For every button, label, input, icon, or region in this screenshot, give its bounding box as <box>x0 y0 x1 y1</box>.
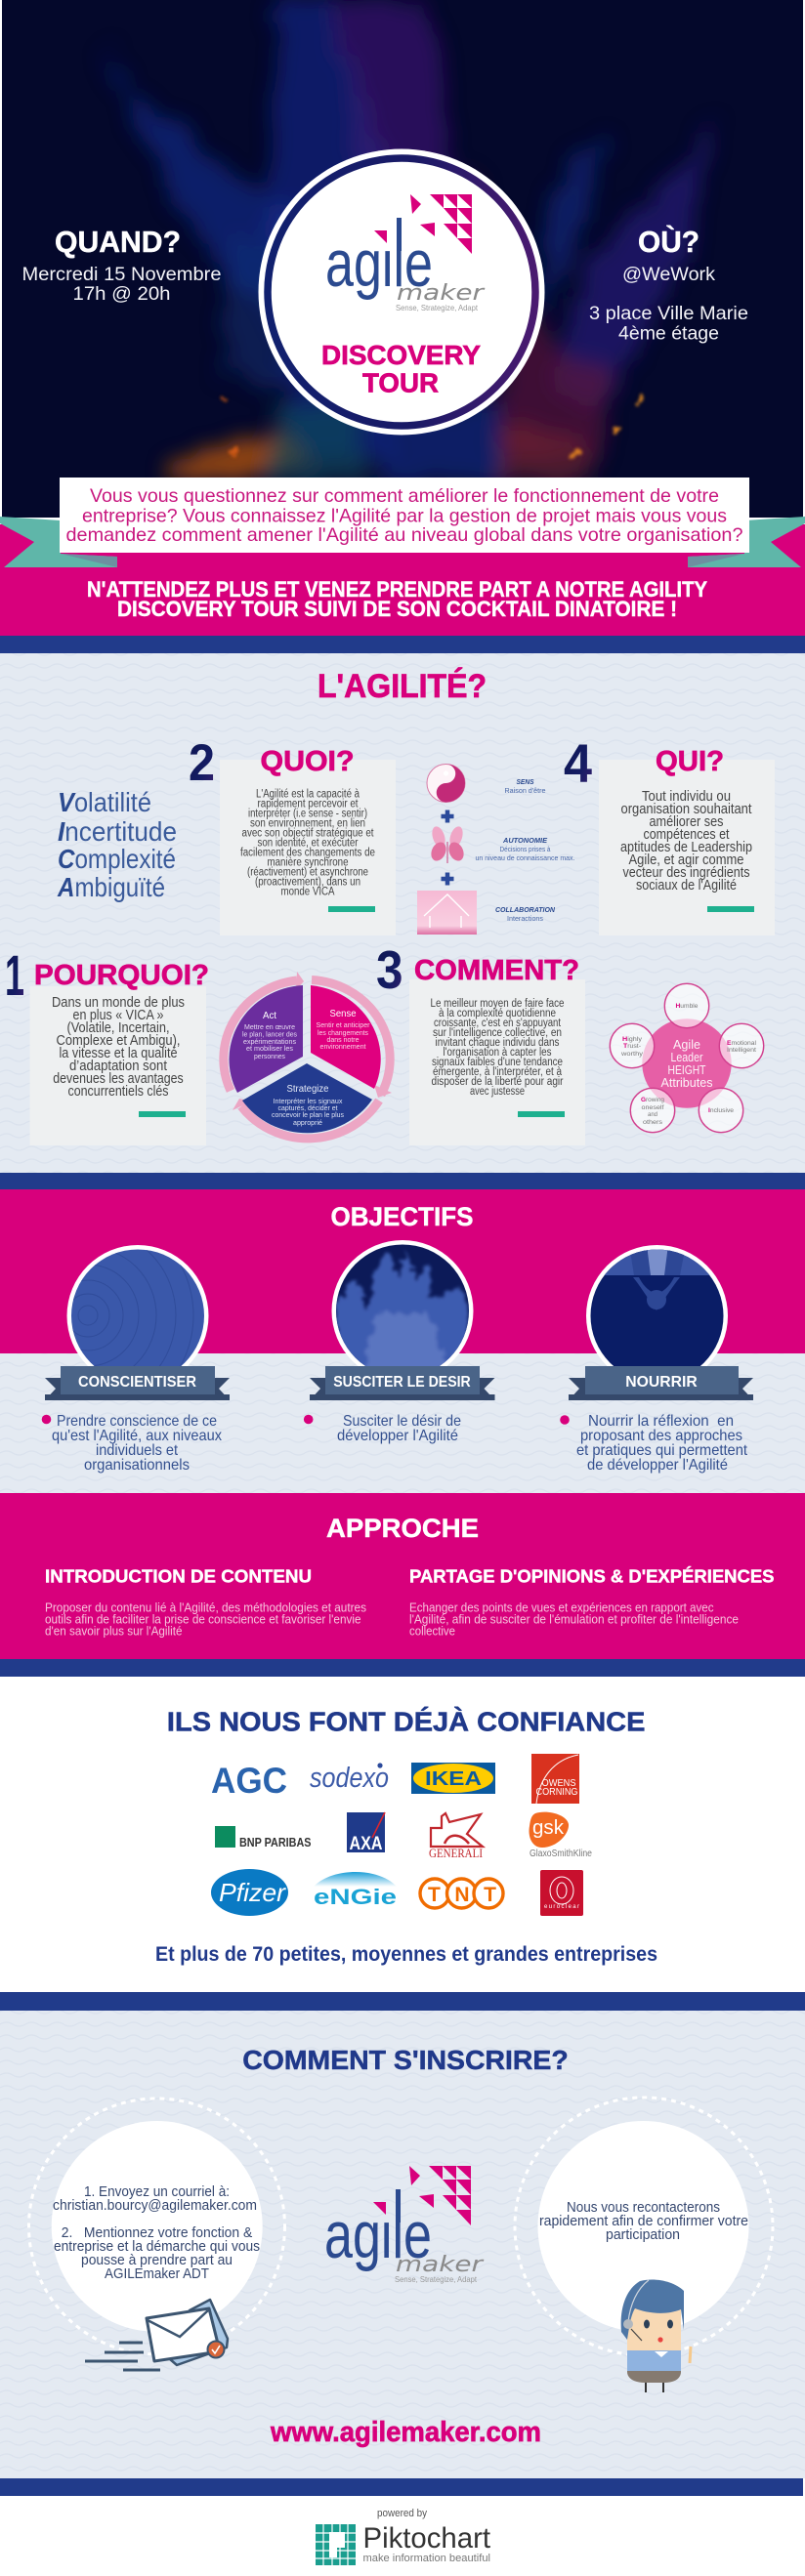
logo: Generali <box>429 1813 483 1860</box>
logo: TNT: TNT <box>428 1884 496 1906</box>
where block: @WeWork <box>622 265 716 285</box>
segment: strategize: approprié <box>293 1120 322 1127</box>
diagram: agile leader height attributes: Humble <box>676 1003 699 1010</box>
section: objectifs pink background <box>0 1189 805 1353</box>
text: objectif 1: organisationnels <box>84 1457 190 1474</box>
footer: piktochart brand: make information beautiful <box>363 2553 490 2564</box>
icon: envelope <box>85 2300 228 2370</box>
step 1 circle: pousse à prendre part au <box>81 2252 233 2268</box>
step 1 circle: AGILEmaker ADT <box>105 2265 209 2282</box>
panel: pourquoi: Dans un monde de plus <box>52 995 185 1011</box>
intro text box <box>60 478 749 553</box>
text: objectif 3 <box>560 1413 748 1474</box>
panel: pourquoi: POURQUOI? <box>34 960 209 991</box>
panel: qui: QUI? <box>656 746 724 777</box>
logo: Owens Corning <box>531 1754 579 1804</box>
section: objectifs light background <box>0 1353 805 1493</box>
VICA list <box>57 787 177 902</box>
panel: qui: sociaux de l'Agilité <box>636 878 737 893</box>
panel: quoi: son identité, et exécuter <box>258 838 359 850</box>
blue divider <box>0 1173 805 1189</box>
panel: comment: Le meilleur moyen de faire face <box>430 998 565 1010</box>
panel: quoi: monde VICA <box>281 887 335 898</box>
column: introduction de contenu <box>45 1566 366 1639</box>
label: collaboration: Interactions <box>507 914 543 923</box>
diagram: agile leader height attributes: Intelligent <box>727 1047 756 1054</box>
cycle arrows <box>224 980 390 1139</box>
subtitle: plus de 70 entreprises: Et plus de 70 petites, moyennes et grandes entreprises <box>155 1943 657 1966</box>
panel: comment: 3 <box>376 939 402 1000</box>
central badge with logo <box>258 148 545 436</box>
panel: pourquoi: en plus « VICA » <box>72 1008 164 1023</box>
logo: agile maker <box>325 194 486 312</box>
diagram: agile leader height attributes: Agile <box>673 1037 700 1052</box>
logo: euroclear: euroclear <box>544 1904 579 1910</box>
diagram: agile leader height attributes: Highly <box>622 1036 643 1043</box>
VICA list: Ambiguïté <box>57 872 165 902</box>
text: objectif 2: Susciter le désir de <box>343 1413 461 1430</box>
panel: pourquoi: (Volatile, Incertain, <box>66 1020 170 1036</box>
logo: Generali: GENERALI <box>429 1847 483 1860</box>
logo: GSK <box>530 1812 592 1859</box>
segment: act: et mobiliser les <box>246 1046 294 1053</box>
segment: sense: les changements <box>318 1030 368 1037</box>
label: sens: SENS <box>516 779 534 786</box>
step 1 circle: entreprise et la démarche qui vous <box>54 2238 260 2255</box>
segment: strategize: Interpréter les signaux <box>274 1099 343 1105</box>
segment: act: personnes <box>254 1054 285 1060</box>
ribbon: susciter le desir: SUSCITER LE DESIR <box>333 1374 471 1391</box>
ribbon: nourrir <box>569 1366 753 1400</box>
panel: pourquoi: Complexe et Ambigu), <box>57 1033 180 1049</box>
diagram: agile leader height attributes: HEIGHT <box>668 1062 706 1077</box>
panel: qui <box>564 732 775 935</box>
icon: piktochart grid <box>316 2524 356 2565</box>
segment: strategize: Strategize <box>287 1084 329 1095</box>
where block: OÙ? <box>638 224 699 259</box>
segment: act: Act <box>263 1011 276 1021</box>
intro text box: entreprise? Vous connaissez l'Agilité par la gestion de projet mais vous vous <box>82 506 727 527</box>
section background: agilité <box>0 653 805 1173</box>
panel: pourquoi <box>5 944 209 1145</box>
logo: sodexo: sodexo <box>310 1763 389 1794</box>
text: objectif 3: proposant des approches <box>580 1428 742 1444</box>
panel: comment: émergente, à l'interpréter, et à <box>433 1066 563 1078</box>
segment: strategize: capturés, décider et <box>277 1105 338 1112</box>
panel: comment: croissante, c'est en s'appuyant <box>434 1018 562 1029</box>
diagram: agile leader height attributes: Trust- <box>623 1043 641 1050</box>
panel: quoi: (réactivement) et asynchrone <box>247 867 368 879</box>
image circle: powder <box>332 1240 473 1366</box>
diagram: agile leader height attributes: Leader <box>670 1050 703 1064</box>
column: introduction de contenu: INTRODUCTION DE CONTENU <box>45 1566 312 1586</box>
text: objectif 3: Nourrir la réflexion en <box>588 1413 734 1430</box>
panel: quoi: manière synchrone <box>268 857 348 869</box>
panel: qui: organisation souhaitant <box>621 802 752 817</box>
ribbon: nourrir: NOURRIR <box>625 1374 698 1391</box>
panel: comment: invitant chaque individu dans <box>436 1037 560 1049</box>
icon: butterfly <box>428 825 467 863</box>
cycle diagram: sense strategize act <box>224 972 392 1139</box>
label: autonomie: AUTONOMIE <box>502 838 547 845</box>
panel: qui: Agile, et agir comme <box>629 852 744 868</box>
segment: strategize: concevoir le plan le plus <box>272 1112 344 1119</box>
heading: comment s'inscrire: COMMENT S'INSCRIRE? <box>242 2045 569 2075</box>
image: collaboration house <box>417 891 477 935</box>
blue divider <box>0 1992 805 2011</box>
central badge with logo: DISCOVERY <box>321 340 481 370</box>
logo: AXA <box>347 1812 385 1854</box>
blue divider <box>0 636 805 653</box>
ribbon: susciter le desir <box>310 1366 494 1400</box>
segment: sense: Sense <box>330 1009 357 1019</box>
logo: IKEA: IKEA <box>425 1768 482 1790</box>
panel: comment: l'organisation à capter les <box>444 1047 552 1059</box>
logo: Owens Corning: CORNING <box>535 1786 578 1798</box>
section: inscription background <box>0 2011 805 2478</box>
call to action text: DISCOVERY TOUR SUIVI DE SON COCKTAIL DINATOIRE ! <box>117 597 677 621</box>
heading: objectifs: OBJECTIFS <box>330 1202 473 1231</box>
footer: piktochart brand: powered by <box>377 2508 427 2519</box>
diagram: agile leader height attributes: oneself <box>641 1104 664 1111</box>
logo: agile maker: agile <box>325 227 433 301</box>
plus sign <box>442 873 453 885</box>
where block: 4ème étage <box>618 324 719 344</box>
logo: agile maker (footer block): maker <box>396 2253 485 2277</box>
step 2 circle: rapidement afin de confirmer votre <box>539 2213 748 2229</box>
where block: 3 place Ville Marie <box>589 304 748 324</box>
panel: quoi: rapidement percevoir et <box>258 799 359 810</box>
step 2 circle <box>515 2098 773 2355</box>
column: introduction de contenu: outils afin de faciliter la prise de conscience et favoriser l'envie <box>45 1613 361 1627</box>
panel: pourquoi: devenues les avantages <box>53 1071 184 1087</box>
teal ribbon right <box>688 517 805 567</box>
panel: quoi: avec son objectif stratégique et <box>242 828 374 840</box>
column: partage d'opinions: PARTAGE D'OPINIONS & D'EXPÉRIENCES <box>409 1566 774 1586</box>
panel: quoi: 2 <box>189 734 215 792</box>
step 2 circle: participation <box>606 2226 680 2243</box>
label: autonomie <box>475 838 574 862</box>
panel: comment: COMMENT? <box>414 955 579 986</box>
text: objectif 2 <box>304 1413 461 1444</box>
plus sign <box>442 810 453 822</box>
central badge with logo: TOUR <box>362 367 439 398</box>
diagram: agile leader height attributes <box>610 983 764 1133</box>
text: objectif 1: qu'est l'Agilité, aux niveaux <box>52 1428 222 1444</box>
heading: approche: APPROCHE <box>326 1514 479 1543</box>
panel: qui: Tout individu ou <box>642 789 731 805</box>
text: objectif 3: de développer l'Agilité <box>587 1457 728 1474</box>
panel: pourquoi: concurrentiels clés <box>68 1084 168 1100</box>
segment: sense: dans notre <box>326 1037 360 1044</box>
column: introduction de contenu: Proposer du contenu lié à l'Agilité, des méthodologies et autres <box>45 1601 366 1615</box>
logo: Pfizer: Pfizer <box>219 1878 286 1907</box>
logo: BNP Paribas <box>215 1826 312 1849</box>
text: objectif 1: Prendre conscience de ce <box>57 1413 217 1430</box>
segment: sense: Sentir et anticiper <box>317 1022 370 1029</box>
panel: pourquoi: la vitesse et la qualité <box>59 1046 178 1061</box>
logo: agile maker (footer block) <box>324 2166 485 2284</box>
logo: BNP Paribas: BNP PARIBAS <box>239 1835 312 1849</box>
diagram: sens autonomie collaboration <box>417 764 574 935</box>
logo: Owens Corning: OWENS <box>541 1777 576 1789</box>
VICA list: Complexité <box>58 844 176 874</box>
icon: yin yang <box>427 764 465 803</box>
logo: agile maker (footer block): Sense, Strategize, Adapt <box>395 2274 478 2284</box>
logo: euroclear <box>540 1870 583 1916</box>
logo: Engie: eNGie <box>314 1885 397 1909</box>
panel: qui: vecteur des ingrédients <box>623 865 750 881</box>
panel: quoi <box>189 734 396 935</box>
pink banner band <box>0 524 805 636</box>
segment: sense: environnement <box>320 1044 366 1051</box>
panel: qui: 4 <box>564 732 592 794</box>
panel: qui: aptitudes de Leadership <box>620 840 752 855</box>
text: objectif 2: développer l'Agilité <box>337 1428 458 1444</box>
footer: piktochart brand <box>316 2508 491 2565</box>
intro text box: Vous vous questionnez sur comment améliorer le fonctionnement de votre <box>90 485 719 507</box>
step 1 circle: 1. Envoyez un courriel à: <box>84 2183 230 2200</box>
panel: comment: avec justesse <box>470 1086 525 1098</box>
call to action text: N'ATTENDEZ PLUS ET VENEZ PRENDRE PART A NOTRE AGILITY <box>87 577 707 602</box>
diagram: agile leader height attributes: Attributes <box>660 1075 713 1090</box>
panel: comment: disposer de la liberté pour agir <box>432 1076 564 1088</box>
diagram: agile leader height attributes: others <box>643 1119 663 1126</box>
icon: support agent <box>621 2279 691 2392</box>
logo: agile maker (footer block): agile <box>324 2198 432 2272</box>
panel: quoi: QUOI? <box>260 746 354 777</box>
segment: act <box>229 985 303 1093</box>
VICA list: Incertitude <box>58 816 177 847</box>
step 1 circle <box>29 2098 285 2354</box>
logo: agile maker: Sense, Strategize, Adapt <box>396 303 479 312</box>
panel: pourquoi: 1 <box>5 944 24 1008</box>
hero background: colour powder explosion <box>2 0 803 518</box>
column: partage d'opinions: Echanger des points de vues et expériences en rapport avec <box>409 1601 713 1615</box>
footer: piktochart brand: Piktochart <box>363 2522 491 2555</box>
label: autonomie: un niveau de connaissance max. <box>475 853 574 862</box>
logo: AXA: AXA <box>350 1834 383 1854</box>
ribbon: conscientiser <box>45 1366 230 1400</box>
panel: comment <box>376 939 585 1145</box>
label: autonomie: Décisions prises à <box>500 845 551 853</box>
segment: act: le plan, lancer des <box>242 1031 297 1039</box>
VICA list: Volatilité <box>58 787 151 817</box>
panel: quoi: L'Agilité est la capacité à <box>256 789 360 801</box>
blue divider <box>0 1659 805 1677</box>
segment: act: expérimentations <box>243 1039 297 1046</box>
diagram: agile leader height attributes: worthy <box>620 1051 644 1058</box>
step 2 circle: Nous vous recontacterons <box>567 2199 720 2216</box>
panel: qui: améliorer ses <box>649 814 723 830</box>
diagram: agile leader height attributes: Growing <box>641 1097 664 1103</box>
label: collaboration <box>495 907 556 923</box>
image circle: handshake <box>586 1245 728 1366</box>
column: partage d'opinions <box>409 1566 774 1639</box>
panel: quoi: son environnement, en lien <box>250 818 365 830</box>
diagram: agile leader height attributes: Inclusive <box>708 1107 734 1114</box>
when block <box>21 225 222 305</box>
column: introduction de contenu: d'en savoir plus sur l'Agilité <box>45 1625 183 1639</box>
image circle: wood rings <box>66 1245 209 1366</box>
logo: GSK: GlaxoSmithKline <box>530 1849 592 1859</box>
when block: 17h @ 20h <box>72 284 170 305</box>
logo: TNT <box>420 1879 503 1908</box>
segment: act: Mettre en œuvre <box>244 1024 295 1031</box>
teal ribbon left <box>0 517 117 567</box>
panel: comment: sur l'intelligence collective, en <box>433 1027 562 1039</box>
segment: sense <box>311 985 381 1089</box>
heading: confiance: ILS NOUS FONT DÉJÀ CONFIANCE <box>167 1707 645 1736</box>
logo: agile maker: maker <box>397 281 486 306</box>
ribbon: conscientiser: CONSCIENTISER <box>78 1374 196 1391</box>
where block <box>589 224 748 344</box>
when block: Mercredi 15 Novembre <box>21 265 222 285</box>
section: approche background <box>0 1493 805 1659</box>
client logos <box>211 1754 592 1916</box>
text: objectif 1 <box>42 1413 222 1474</box>
logo: Engie <box>314 1872 397 1909</box>
diagram: agile leader height attributes: and <box>648 1111 657 1118</box>
panel: quoi: (proactivement), dans un <box>255 877 360 889</box>
panel: quoi: facilement des changements de <box>240 848 375 859</box>
step 1 circle: christian.bourcy@agilemaker.com <box>53 2197 257 2214</box>
logo: AGC: AGC <box>211 1761 287 1801</box>
logo: GSK: gsk <box>532 1817 565 1839</box>
panel: comment: signaux faibles d'une tendance <box>432 1057 563 1068</box>
logo: IKEA <box>411 1763 495 1794</box>
step 1 circle: 2. Mentionnez votre fonction & <box>62 2224 252 2241</box>
panel: comment: à la complexité quotidienne <box>439 1008 556 1019</box>
label: sens <box>504 779 545 795</box>
blue divider <box>0 2478 803 2496</box>
panel: qui: compétences et <box>643 827 729 843</box>
column: partage d'opinions: collective <box>409 1625 455 1639</box>
text: objectif 1: individuels et <box>96 1442 179 1459</box>
website url: www.agilemaker.com <box>270 2417 541 2448</box>
label: sens: Raison d'être <box>504 786 545 795</box>
label: collaboration: COLLABORATION <box>495 907 556 914</box>
when block: QUAND? <box>55 225 181 259</box>
heading: agilité: L'AGILITÉ? <box>318 668 487 705</box>
logo: Pfizer <box>211 1869 288 1916</box>
column: partage d'opinions: l'Agilité, afin de susciter de l'émulation et profiter de l'intelligence <box>409 1613 739 1627</box>
text: objectif 3: et pratiques qui permettent <box>576 1442 748 1459</box>
panel: quoi: interpréter (i.e sense - sentir) <box>248 809 367 820</box>
intro text box: demandez comment amener l'Agilité au niveau global dans votre organisation? <box>66 524 743 546</box>
panel: pourquoi: d’adaptation sont <box>69 1059 167 1074</box>
segment: strategize <box>242 1063 372 1133</box>
diagram: agile leader height attributes: Emotional <box>727 1040 757 1047</box>
call to action text <box>87 577 707 621</box>
